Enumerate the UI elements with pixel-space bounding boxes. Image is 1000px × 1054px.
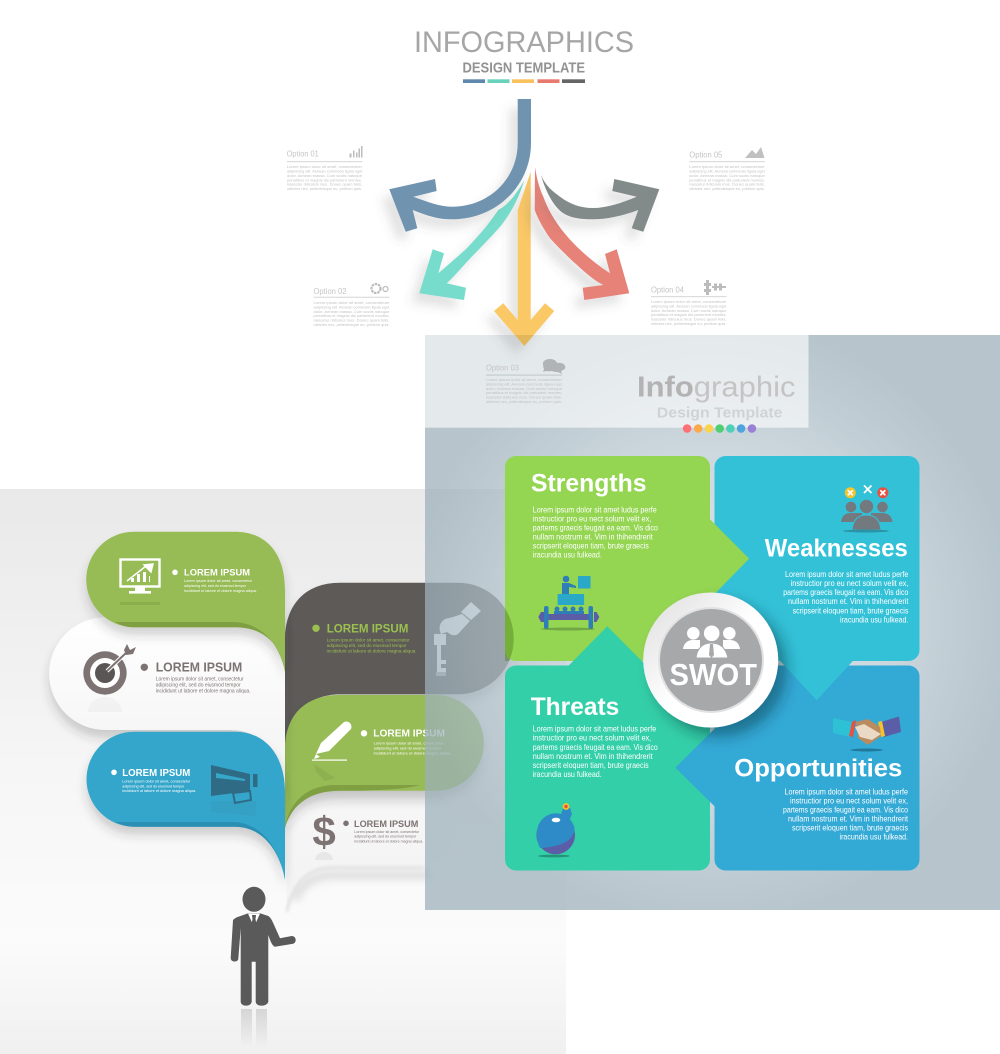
icon: bars xyxy=(350,146,362,158)
option 05 xyxy=(689,147,766,191)
icon: handshake xyxy=(833,716,901,752)
icon: monitor chart xyxy=(120,560,160,605)
option 02: adipiscing elit. Aenean commodo ligula eget xyxy=(314,304,390,309)
text: Threats body: nullam nostrum et. Vim in thihendrerit xyxy=(533,751,653,761)
label: white dollar bubble xyxy=(343,819,423,843)
label: white dollar bubble: adipiscing elit, sed do eiusmod tempor xyxy=(354,835,417,839)
label: green pen bubble: Lorem ipsum dolor sit amet, consectetur xyxy=(374,742,444,746)
option 01: nascetur ridiculus mus. Donec quam felis, xyxy=(287,182,362,187)
option 03: Option 03 xyxy=(486,363,519,373)
icon: hand holding key xyxy=(434,602,481,676)
option 02: dolor. Aenean massa. Cum sociis natoque xyxy=(314,309,390,314)
label: white dollar bubble: Lorem ipsum dolor sit amet, consectetur xyxy=(354,830,420,834)
arrow: blue xyxy=(389,99,531,232)
option 04: penatibus et magnis dis parturient montes, xyxy=(651,312,726,317)
option 01: Option 01 xyxy=(287,149,319,159)
icon: dollar sign: $ xyxy=(312,808,336,855)
option 04: dolor. Aenean massa. Cum sociis natoque xyxy=(651,308,727,313)
label: dark bubble xyxy=(312,622,417,654)
icon: team xyxy=(683,625,740,658)
label: white target bubble: LOREM IPSUM xyxy=(156,661,242,675)
label: dark bubble: adipiscing elit, sed do eiusmod tempor xyxy=(327,643,407,648)
bubble: dark grey xyxy=(285,583,514,750)
label: green pen bubble: incididunt ut labore et dolore magna aliqua. xyxy=(374,751,452,755)
text: Weaknesses body: scripserit eloquen tiam, brute graecis xyxy=(793,605,908,615)
option 03: Lorem ipsum dolor sit amet, consectetuer xyxy=(486,377,563,382)
arrow: Weaknesses pointer xyxy=(780,660,853,700)
label: white dollar bubble: incididunt ut labore et dolore magna aliqua. xyxy=(354,839,423,843)
option 04 xyxy=(651,280,727,326)
option 05: ultricies nec, pellentesque eu, pretium quis. xyxy=(689,186,765,191)
heading: Opportunities: Opportunities xyxy=(734,755,902,783)
text: Strengths body: scripserit eloquen tiam, brute graecis xyxy=(533,541,649,551)
text: Strengths body xyxy=(533,504,658,560)
icon: target and arrow xyxy=(83,644,136,712)
label: green pen bubble xyxy=(361,728,452,755)
card: Weaknesses xyxy=(714,456,920,661)
colour dots xyxy=(683,424,756,433)
icon: gears xyxy=(372,284,388,293)
text: Opportunities body: instructior pro eu nect solum velit ex, xyxy=(790,795,908,805)
label: green chart bubble: adipiscing elit, sed do eiusmod tempor xyxy=(184,584,247,588)
bubble: white target xyxy=(49,617,285,802)
option 03: dolor. Aenean massa. Cum sociis natoque xyxy=(486,386,563,391)
heading: Threats: Threats xyxy=(531,693,619,721)
text: Threats body xyxy=(533,724,658,779)
arrow: teal xyxy=(419,181,524,300)
label: white target bubble: Lorem ipsum dolor sit amet, consectetur xyxy=(156,677,244,683)
option 05: penatibus et magnis dis parturient montes, xyxy=(689,177,765,182)
heading: Infographic: Infographic xyxy=(637,372,796,404)
card: Strengths xyxy=(505,456,710,661)
heading: Weaknesses: Weaknesses xyxy=(765,535,908,563)
text: Threats body: iracundia usu fulkead. xyxy=(533,769,602,779)
icon: pen xyxy=(312,721,351,781)
text: Weaknesses body: iracundia usu fulkead. xyxy=(840,614,908,624)
arrow: grey xyxy=(541,175,659,232)
option 03: penatibus et magnis dis parturient montes, xyxy=(486,390,562,395)
SWOT badge xyxy=(643,592,778,728)
text: Weaknesses body xyxy=(783,569,909,624)
label: blue megaphone bubble: adipiscing elit, sed do eiusmod tempor xyxy=(122,784,185,788)
translucent header overlay xyxy=(425,335,808,428)
icon: speech bubbles xyxy=(543,359,565,374)
text: Opportunities body: partems graecis feugait ea eam. Vis dico xyxy=(783,804,908,814)
icon: team with crosses xyxy=(841,486,892,532)
SWOT diagram xyxy=(505,456,920,870)
icon: puzzle xyxy=(704,280,726,295)
option 02: ultricies nec, pellentesque eu, pretium quis. xyxy=(314,322,390,327)
option 05: dolor. Aenean massa. Cum sociis natoque xyxy=(689,173,766,178)
label: white target bubble: adipiscing elit, sed do eiusmod tempor xyxy=(156,683,241,689)
label: green pen bubble: adipiscing elit, sed do eiusmod tempor xyxy=(374,746,442,750)
text: Strengths body: Lorem ipsum dolor sit amet ludus perfe xyxy=(533,504,657,514)
option 05: Option 05 xyxy=(689,150,723,160)
arrow: Strengths pointer xyxy=(708,518,748,600)
icon: businessman xyxy=(231,887,296,1047)
label: white dollar bubble: LOREM IPSUM xyxy=(354,819,418,830)
option 01: dolor. Aenean massa. Cum sociis natoque xyxy=(287,173,363,178)
text: Threats body: Lorem ipsum dolor sit amet ludus perfe xyxy=(533,724,656,734)
option 01: Lorem ipsum dolor sit amet, consectetuer xyxy=(287,164,363,169)
option 02 xyxy=(314,284,390,327)
option 03: adipiscing elit. Aenean commodo ligula eget xyxy=(486,381,563,386)
text: Weaknesses body: partems graecis feugait ea eam. Vis dico xyxy=(783,587,908,597)
text: Strengths body: instructior pro eu nect solum velit ex, xyxy=(533,513,651,523)
option 03: nascetur ridiculus mus. Donec quam felis, xyxy=(486,395,562,400)
option 03: ultricies nec, pellentesque eu, pretium quis. xyxy=(486,399,562,404)
option 02: Lorem ipsum dolor sit amet, consectetuer xyxy=(314,300,390,305)
label: white target bubble xyxy=(141,661,251,694)
text: Opportunities body xyxy=(783,786,909,841)
card: Opportunities xyxy=(714,666,920,870)
text: Weaknesses body: nullam nostrum et. Vim in thihendrerit xyxy=(788,596,909,606)
option 04: Lorem ipsum dolor sit amet, consectetuer xyxy=(651,299,727,304)
option 02: penatibus et magnis dis parturient montes, xyxy=(314,313,390,318)
bubble edge showing through the card xyxy=(505,608,514,661)
bubble: green chart xyxy=(86,532,285,672)
text: Opportunities body: scripserit eloquen tiam, brute graecis xyxy=(792,822,908,832)
option 01: penatibus et magnis dis parturient montes, xyxy=(287,177,362,182)
label: green chart bubble: incididunt ut labore et dolore magna aliqua. xyxy=(184,589,257,593)
arrow: yellow centre xyxy=(494,172,554,346)
text: Strengths body: nullam nostrum et. Vim in thihendrerit xyxy=(533,532,653,542)
title: INFOGRAPHICS xyxy=(414,26,634,59)
label: blue megaphone bubble xyxy=(111,768,196,793)
option 04: adipiscing elit. Aenean commodo ligula eget xyxy=(651,303,727,308)
label: green chart bubble: Lorem ipsum dolor sit amet, consectetur xyxy=(184,579,253,583)
text: SWOT: SWOT xyxy=(670,658,757,692)
option 05: adipiscing elit. Aenean commodo ligula eget xyxy=(689,168,766,174)
bubble: white lower right xyxy=(285,786,456,912)
subtitle: DESIGN TEMPLATE xyxy=(462,60,585,77)
text: Opportunities body: nullam nostrum et. Vim in thihendrerit xyxy=(788,813,909,823)
subheading: Design Template: Design Template xyxy=(657,404,782,421)
option 01 xyxy=(287,146,363,191)
option 04: Option 04 xyxy=(651,285,684,295)
bubble diagram xyxy=(49,532,514,912)
text: Strengths body: partems graecis feugait ea eam. Vis dico xyxy=(533,523,658,533)
label: dark bubble: incididunt ut labore et dolore magna aliqua. xyxy=(327,648,417,654)
card: Threats xyxy=(505,666,710,870)
icon: megaphone xyxy=(211,765,258,816)
text: Strengths body: iracundia usu fulkead. xyxy=(533,550,602,560)
heading: Strengths: Strengths xyxy=(531,470,646,498)
arrow: Threats pointer xyxy=(568,627,647,667)
icon: bomb xyxy=(536,803,575,857)
icon: mountains xyxy=(745,147,764,158)
label: blue megaphone bubble: LOREM IPSUM xyxy=(122,768,190,779)
background panel: SWOT template xyxy=(425,335,1000,910)
label: blue megaphone bubble: Lorem ipsum dolor sit amet, consectetur xyxy=(122,780,191,784)
arrow: red xyxy=(535,167,629,300)
label: dark bubble: Lorem ipsum dolor sit amet, consectetur xyxy=(327,638,410,642)
arrow: Opportunities pointer xyxy=(676,728,716,807)
label: dark bubble: LOREM IPSUM xyxy=(327,622,408,636)
label: green chart bubble: LOREM IPSUM xyxy=(184,568,250,579)
text: Opportunities body: iracundia usu fulkead. xyxy=(840,831,908,841)
option 01: adipiscing elit. Aenean commodo ligula eget xyxy=(287,168,363,174)
option 04: nascetur ridiculus mus. Donec quam felis, xyxy=(651,317,726,322)
option 01: ultricies nec, pellentesque eu, pretium quis. xyxy=(287,186,362,191)
option 03 xyxy=(486,359,565,404)
text: Threats body: instructior pro eu nect solum velit ex, xyxy=(533,733,651,743)
option 02: nascetur ridiculus mus. Donec quam felis, xyxy=(314,318,390,323)
option 05: nascetur ridiculus mus. Donec quam felis, xyxy=(689,182,765,187)
text: Weaknesses body: Lorem ipsum dolor sit amet ludus perfe xyxy=(785,569,909,579)
label: blue megaphone bubble: incididunt ut labore et dolore magna aliqua. xyxy=(122,789,196,793)
option 05: Lorem ipsum dolor sit amet, consectetuer xyxy=(689,164,765,169)
text: Threats body: partems graecis feugait ea eam. Vis dico xyxy=(533,742,658,752)
text: Weaknesses body: instructior pro eu nect solum velit ex, xyxy=(791,578,908,588)
bubble: blue megaphone xyxy=(87,732,285,880)
label: white target bubble: incididunt ut labore et dolore magna aliqua. xyxy=(156,688,251,694)
colour bars xyxy=(463,79,585,83)
label: green pen bubble: LOREM IPSUM xyxy=(373,728,445,740)
option 04: ultricies nec, pellentesque eu, pretium quis. xyxy=(651,321,726,326)
text: Opportunities body: Lorem ipsum dolor sit amet ludus perfe xyxy=(784,786,908,796)
option 02: Option 02 xyxy=(314,286,347,296)
background panel: left bubble template xyxy=(0,489,566,1054)
label: green chart bubble xyxy=(172,568,257,593)
icon: presenter on dumbbell xyxy=(538,576,599,630)
bubble: green pen xyxy=(285,695,484,828)
text: Threats body: scripserit eloquen tiam, brute graecis xyxy=(533,760,649,770)
